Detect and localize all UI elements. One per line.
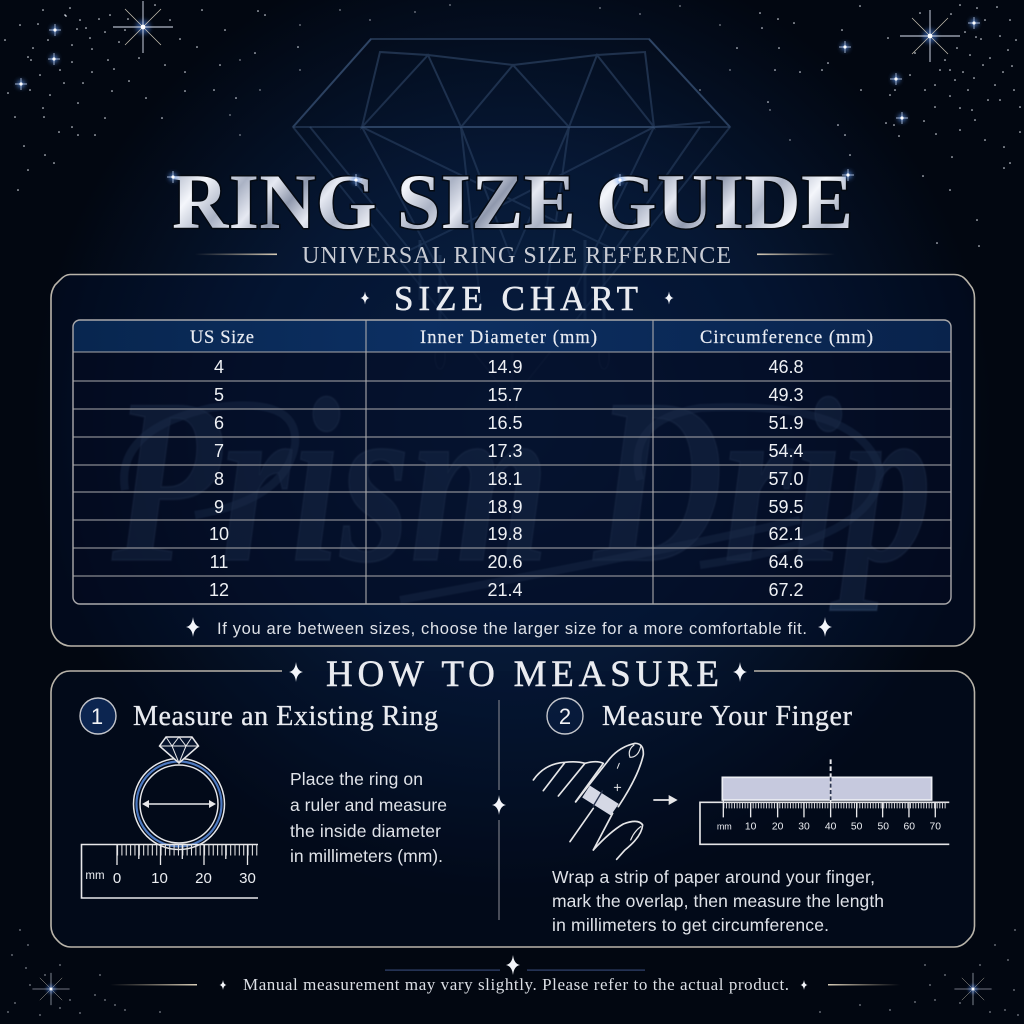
ruler: ring measure: 10: [151, 870, 168, 887]
panel: how to measure: [51, 654, 974, 947]
heading: size chart: SIZE CHART: [394, 279, 638, 318]
step 1 text: in millimeters (mm).: [290, 846, 443, 866]
size table: 18.1: [487, 469, 523, 489]
size table: 7: [214, 441, 224, 461]
icon: ring with diamond: [134, 737, 224, 850]
step 1 text: a ruler and measure: [290, 795, 447, 815]
ruler: ring measure: 0: [113, 870, 121, 887]
size table: 4: [214, 357, 224, 377]
size table: 59.5: [768, 497, 804, 517]
step 2 text: in millimeters to get circumference.: [552, 915, 829, 935]
ruler with paper strip: [700, 759, 949, 844]
ruler: ring measure: 30: [239, 870, 256, 887]
ruler with paper strip: 60: [904, 821, 915, 832]
size table: 5: [214, 385, 224, 405]
step 1 text: [290, 769, 447, 866]
size table: 16.5: [487, 413, 523, 433]
size table: 20.6: [487, 552, 523, 572]
size table: 17.3: [487, 441, 523, 461]
step 2 heading: 2: [559, 704, 571, 729]
size table: 67.2: [768, 580, 804, 600]
title: RING SIZE GUIDE: [172, 158, 853, 245]
title: RING SIZE GUIDE: [172, 158, 853, 245]
watermark: diamond logo: [293, 39, 730, 412]
size table: 49.3: [768, 385, 804, 405]
ruler with paper strip: 50: [851, 821, 863, 832]
size table: 19.8: [487, 524, 523, 544]
size table: 6: [214, 413, 224, 433]
size table: 51.9: [768, 413, 804, 433]
size table: 8: [214, 469, 224, 489]
ruler: ring measure: 20: [195, 870, 212, 887]
step 2 heading: Measure Your Finger: [602, 701, 853, 732]
size table: 62.1: [768, 524, 804, 544]
arrow: [653, 795, 678, 805]
size table: 18.9: [487, 497, 523, 517]
ruler with paper strip: 30: [798, 821, 810, 832]
heading: how to measure: HOW TO MEASURE: [326, 654, 719, 695]
size table: [73, 320, 951, 604]
size table: 11: [210, 552, 228, 572]
size note: If you are between sizes, choose the larger size for a more comfortable fit.: [217, 620, 807, 638]
step 1 text: the inside diameter: [290, 821, 441, 841]
ruler with paper strip: 40: [825, 821, 837, 832]
size table: US Size: [190, 328, 254, 348]
ruler with paper strip: 10: [745, 821, 757, 832]
divider: [492, 700, 506, 920]
size table: Circumference (mm): [700, 328, 873, 348]
icon: hand with paper strip: [533, 743, 643, 859]
size table: 54.4: [768, 441, 804, 461]
step 2 text: mark the overlap, then measure the length: [552, 891, 884, 911]
ruler with paper strip: 70: [930, 821, 941, 832]
step 1 heading: Measure an Existing Ring: [133, 701, 438, 732]
size table: 46.8: [768, 357, 804, 377]
size table: 12: [209, 580, 229, 600]
size table: 14.9: [487, 357, 523, 377]
step 1 text: Place the ring on: [290, 769, 423, 789]
footer note: [110, 955, 900, 994]
step 2 text: [552, 867, 884, 935]
size table: 21.4: [487, 580, 523, 600]
ruler with paper strip: 50: [878, 821, 889, 832]
size table: 9: [214, 497, 224, 517]
ruler with paper strip: 20: [772, 821, 784, 832]
ruler: ring measure: mm: [85, 870, 105, 882]
ruler with paper strip: mm: [717, 821, 732, 831]
size table: 10: [209, 524, 229, 544]
step 2 text: Wrap a strip of paper around your finger,: [552, 867, 875, 887]
size table: 64.6: [768, 552, 804, 572]
footer note: Manual measurement may vary slightly. Please refer to the actual product.: [243, 975, 789, 994]
size table: 57.0: [768, 469, 804, 489]
size table: 15.7: [487, 385, 523, 405]
subtitle: UNIVERSAL RING SIZE REFERENCE: [302, 243, 731, 269]
size table: Inner Diameter (mm): [420, 328, 597, 348]
step 1 heading: 1: [91, 704, 103, 729]
panel: size chart: [51, 274, 974, 646]
ruler: ring measure: [82, 844, 258, 898]
